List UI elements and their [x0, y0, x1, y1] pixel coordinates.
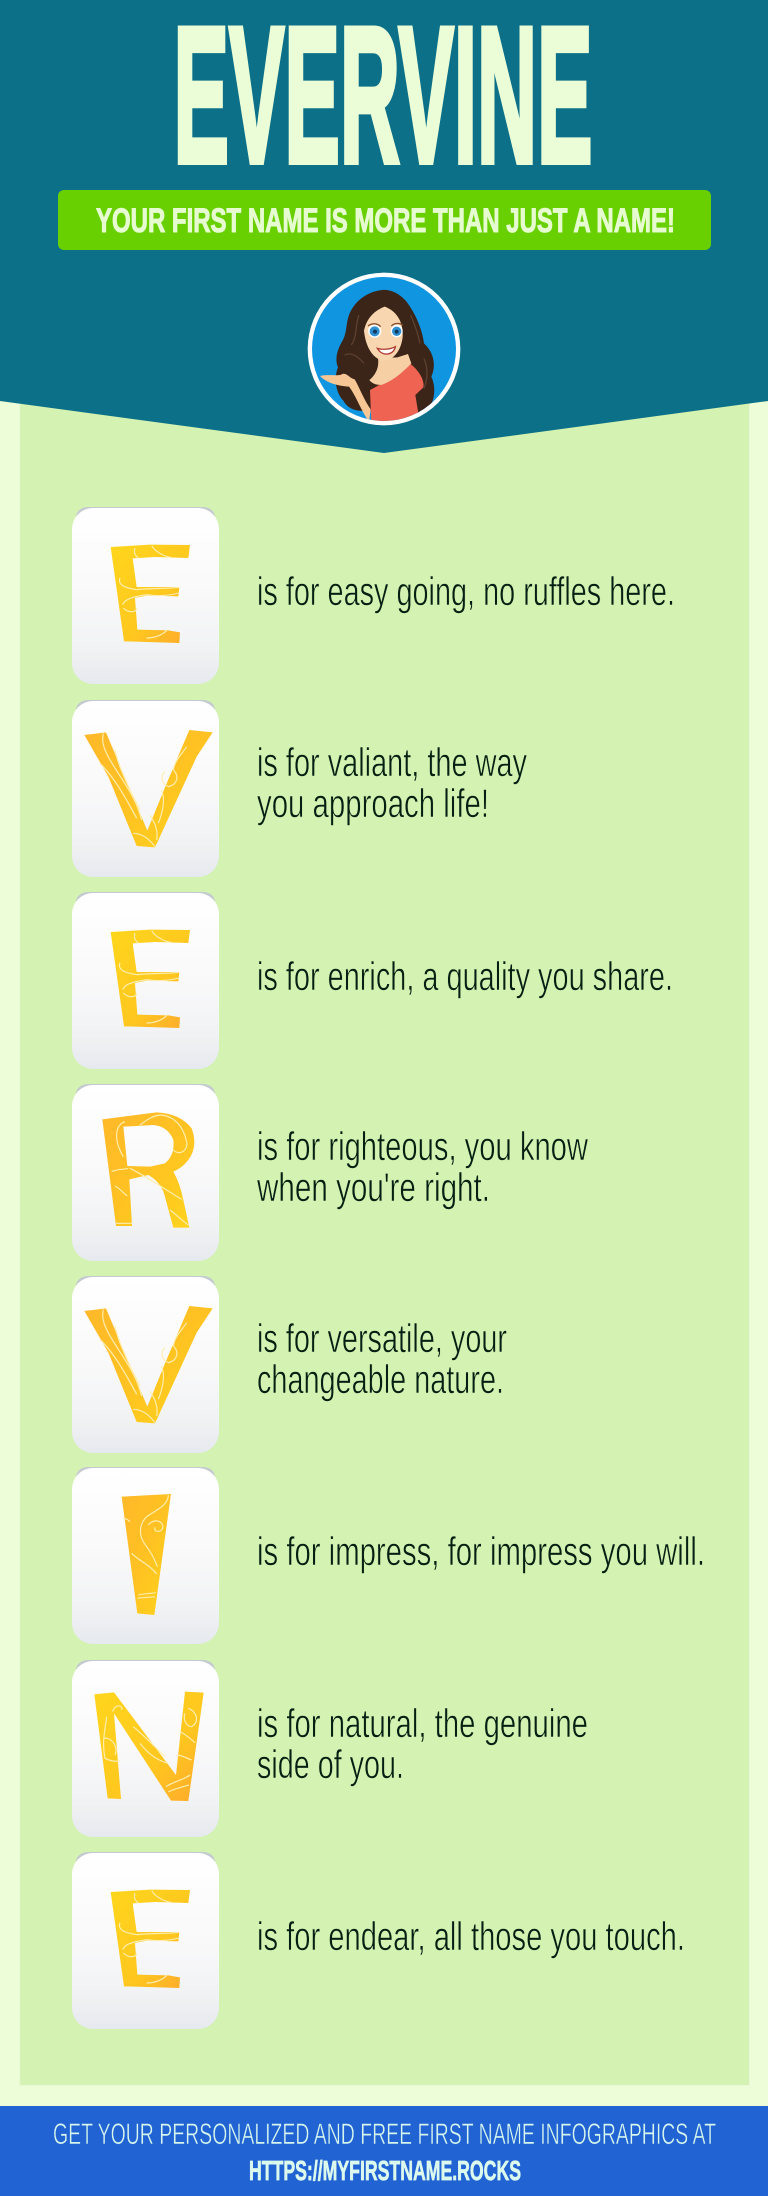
arm and hand — [320, 374, 371, 422]
text: row 2 — [257, 741, 527, 826]
letter card: V — [72, 700, 219, 877]
row 3 — [72, 892, 673, 1069]
text: row 4: is for righteous, you know — [257, 1125, 588, 1169]
eyes — [368, 324, 381, 338]
shirt — [370, 364, 424, 423]
row 7 — [72, 1660, 588, 1837]
neck and chest — [369, 354, 411, 385]
mouth — [377, 347, 395, 354]
row 5 — [72, 1276, 507, 1453]
panel: content area — [20, 395, 749, 2085]
text: row 7: is for natural, the genuine — [257, 1702, 588, 1746]
letter card: V — [72, 1276, 219, 1453]
letter card: E — [72, 892, 219, 1069]
letter card: I — [72, 1467, 219, 1644]
row 8 — [72, 1852, 685, 2029]
letter card: E — [72, 507, 219, 684]
subtitle banner — [58, 190, 711, 250]
footer band — [0, 2106, 768, 2196]
text: row 5 — [257, 1317, 507, 1402]
text: row 7: side of you. — [257, 1743, 404, 1787]
row 1 — [72, 507, 675, 684]
header: teal chevron background — [0, 0, 768, 453]
text: row 2: you approach life! — [257, 782, 489, 826]
letter card: R — [72, 1084, 219, 1261]
text: row 2: is for valiant, the way — [257, 741, 527, 785]
letter card: E — [72, 1852, 219, 2029]
hair — [336, 290, 434, 413]
row 4 — [72, 1084, 588, 1261]
text: row 4: when you're right. — [256, 1166, 490, 1210]
face — [364, 307, 403, 361]
footer url: HTTPS://MYFIRSTNAME.ROCKS — [249, 2155, 521, 2186]
row 6 — [72, 1467, 705, 1644]
letter card: N — [72, 1660, 219, 1837]
text: row 5: is for versatile, your — [257, 1317, 507, 1361]
icon: woman avatar — [308, 273, 460, 425]
row 2 — [72, 700, 527, 877]
text: row 4 — [256, 1125, 588, 1210]
text: row 7 — [257, 1702, 588, 1787]
text: row 5: changeable nature. — [257, 1358, 504, 1402]
